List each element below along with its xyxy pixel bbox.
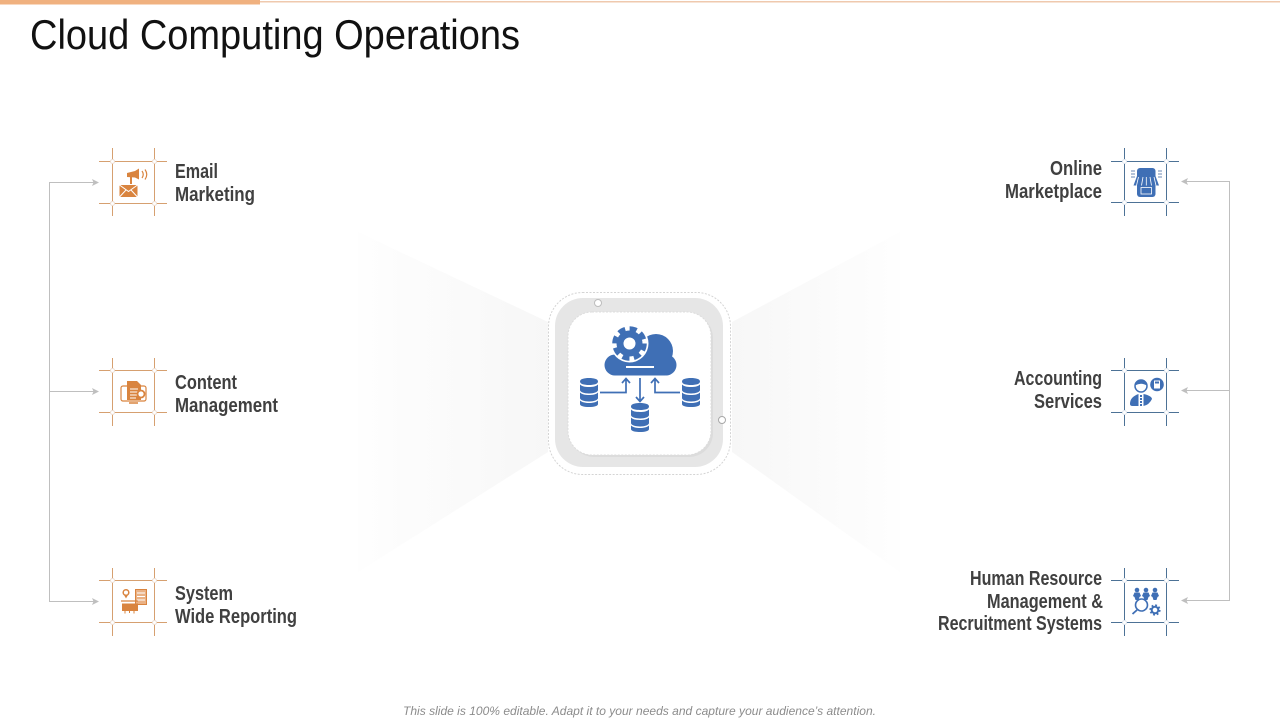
- label: [175, 372, 278, 417]
- icon: people, magnifier and gear: [1132, 588, 1160, 615]
- label: Services: [1034, 391, 1102, 413]
- icon: accountant with calculator bubble: [1130, 378, 1164, 406]
- label: Online: [1050, 158, 1102, 180]
- right light cone: [732, 232, 900, 572]
- label: Management: [175, 395, 278, 417]
- icon frame: [1111, 358, 1179, 426]
- title: Cloud Computing Operations: [30, 11, 520, 58]
- icon frame: [99, 148, 167, 216]
- item: Human Resource Management & Recruitment Systems: [938, 568, 1179, 636]
- hub frame: [548, 292, 730, 474]
- item: System Wide Reporting: [99, 568, 297, 636]
- label: [175, 583, 297, 628]
- item: Email Marketing: [99, 148, 255, 216]
- label: Wide Reporting: [175, 606, 297, 628]
- icon: phone storefront: [1131, 168, 1162, 197]
- label: Human Resource: [970, 568, 1102, 590]
- label: System: [175, 583, 233, 605]
- item: Online Marketplace: [1005, 148, 1179, 216]
- icon frame: [1111, 148, 1179, 216]
- label: [175, 161, 255, 206]
- label: [1014, 368, 1102, 413]
- label: Content: [175, 372, 237, 394]
- item: Content Management: [99, 358, 278, 426]
- label: Management &: [987, 591, 1103, 613]
- right connector arrows: [1181, 178, 1230, 604]
- icon frame: [99, 568, 167, 636]
- icon: cloud with gear and databases: [580, 324, 700, 432]
- icon frame: [99, 358, 167, 426]
- label: Marketplace: [1005, 181, 1102, 203]
- central hub: [548, 292, 730, 474]
- label: Accounting: [1014, 368, 1102, 390]
- icon: document on monitor with gear: [121, 381, 146, 403]
- label: [1005, 158, 1102, 203]
- label: Email: [175, 161, 218, 183]
- label: [938, 568, 1103, 635]
- icon frame: [1111, 568, 1179, 636]
- left light cone: [358, 232, 548, 572]
- label: Marketing: [175, 184, 255, 206]
- icon: map pin, report board and calculator: [121, 590, 146, 614]
- label: Recruitment Systems: [938, 613, 1102, 635]
- left connector arrows: [50, 179, 99, 605]
- top accent bar: [0, 0, 1280, 4]
- icon: megaphone and envelope: [120, 168, 147, 197]
- item: Accounting Services: [1014, 358, 1179, 426]
- footer note: This slide is 100% editable. Adapt it to your needs and capture your audience’s attention.: [403, 704, 876, 718]
